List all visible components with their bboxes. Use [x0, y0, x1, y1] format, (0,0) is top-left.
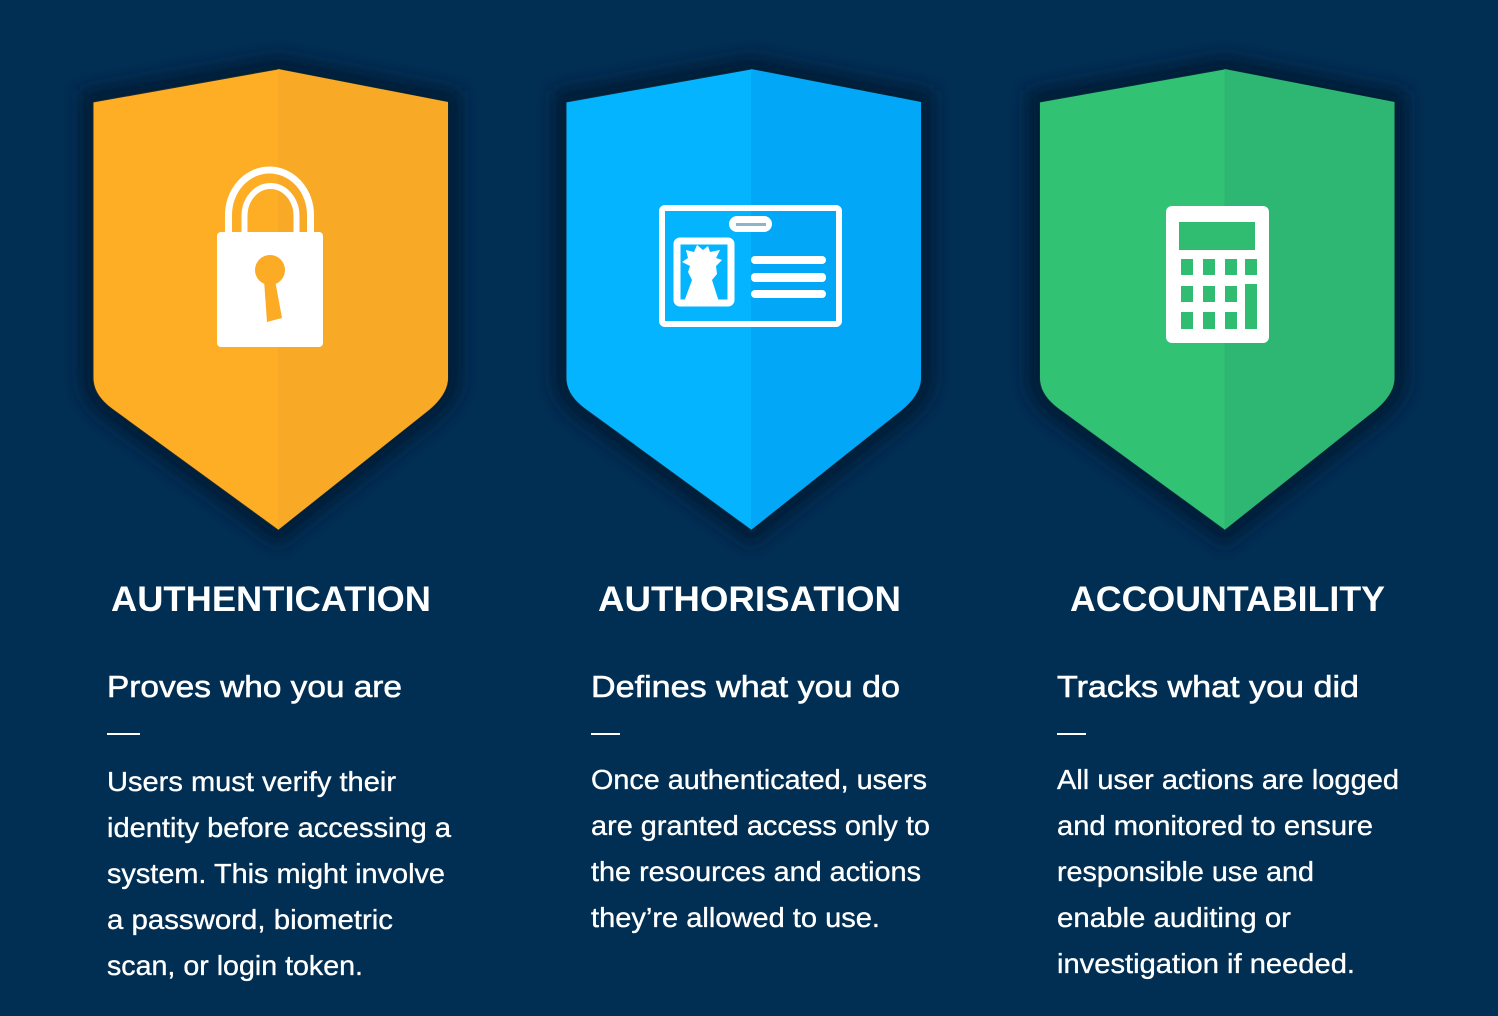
body text: accountability: All user actions are logged — [1057, 764, 1399, 795]
heading: authentication: AUTHENTICATION — [111, 580, 431, 619]
dash — [107, 733, 140, 735]
body text: authentication: a password, biometric — [107, 904, 393, 935]
body text: authorisation: are granted access only to — [591, 810, 930, 841]
shield: green — [1040, 69, 1394, 530]
body text: authentication: Users must verify their — [107, 766, 396, 797]
body text: authentication — [107, 766, 452, 981]
subheading: defines what you do: Defines what you do — [591, 669, 900, 704]
dash — [591, 733, 620, 735]
heading: accountability: ACCOUNTABILITY — [1070, 580, 1385, 619]
shield: blue — [566, 69, 921, 530]
body text: authorisation: Once authenticated, users — [591, 764, 927, 795]
shield: orange — [93, 69, 448, 530]
panel: accountability — [1040, 69, 1399, 979]
body text: accountability — [1057, 764, 1399, 979]
body text: authentication: scan, or login token. — [107, 950, 363, 981]
body text: authorisation: they’re allowed to use. — [591, 902, 880, 933]
icon: calculator — [1166, 206, 1269, 343]
heading: authorisation: AUTHORISATION — [598, 580, 901, 619]
body text: authentication: identity before accessing a — [107, 812, 452, 843]
body text: accountability: responsible use and — [1057, 856, 1314, 887]
body text: accountability: enable auditing or — [1057, 902, 1291, 933]
panel: authorisation — [566, 69, 930, 933]
dash — [1057, 733, 1086, 735]
panel: authentication — [93, 69, 452, 981]
icon: padlock — [217, 170, 323, 347]
body text: authorisation — [591, 764, 930, 933]
body text: authentication: system. This might involve — [107, 858, 445, 889]
icon: id card — [662, 208, 839, 324]
body text: authorisation: the resources and actions — [591, 856, 921, 887]
body text: accountability: and monitored to ensure — [1057, 810, 1373, 841]
subheading: tracks what you did: Tracks what you did — [1057, 669, 1359, 704]
subheading: proves who you are: Proves who you are — [107, 669, 402, 704]
body text: accountability: investigation if needed. — [1057, 948, 1355, 979]
